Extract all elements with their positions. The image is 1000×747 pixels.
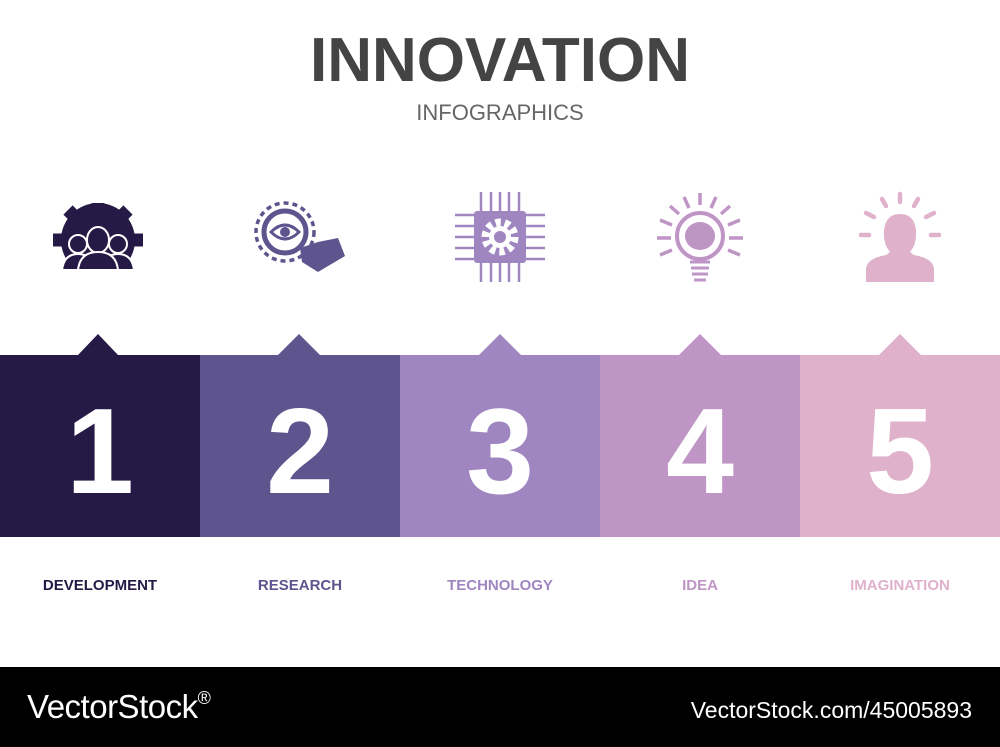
icon: development gear people (50, 203, 146, 284)
panel 4 (600, 334, 800, 537)
panel 5: 5 (866, 383, 934, 519)
icon: idea bulb (657, 193, 743, 280)
subtitle: INFOGRAPHICS (416, 100, 584, 125)
icon: imagination head (861, 194, 939, 282)
label 1: DEVELOPMENT (43, 577, 157, 594)
panel 1: 1 (66, 383, 134, 519)
label 2: RESEARCH (258, 577, 342, 594)
panel 3: 3 (466, 383, 534, 519)
footer: ® (198, 688, 211, 708)
icon: research eye magnifier (256, 203, 345, 272)
panel 5 (800, 334, 1000, 537)
panel 1 (0, 334, 200, 537)
panel 2 (200, 334, 400, 537)
icon: technology chip (455, 192, 545, 282)
panel 2: 2 (266, 383, 334, 519)
panel 3 (400, 334, 600, 537)
label 4: IDEA (682, 577, 718, 594)
label 3: TECHNOLOGY (447, 577, 553, 594)
label 5: IMAGINATION (850, 577, 950, 594)
panel 4: 4 (666, 383, 734, 519)
title: INNOVATION (310, 26, 690, 95)
footer: VectorStock (27, 688, 198, 725)
footer (0, 667, 1000, 747)
footer: VectorStock.com/45005893 (691, 697, 972, 723)
